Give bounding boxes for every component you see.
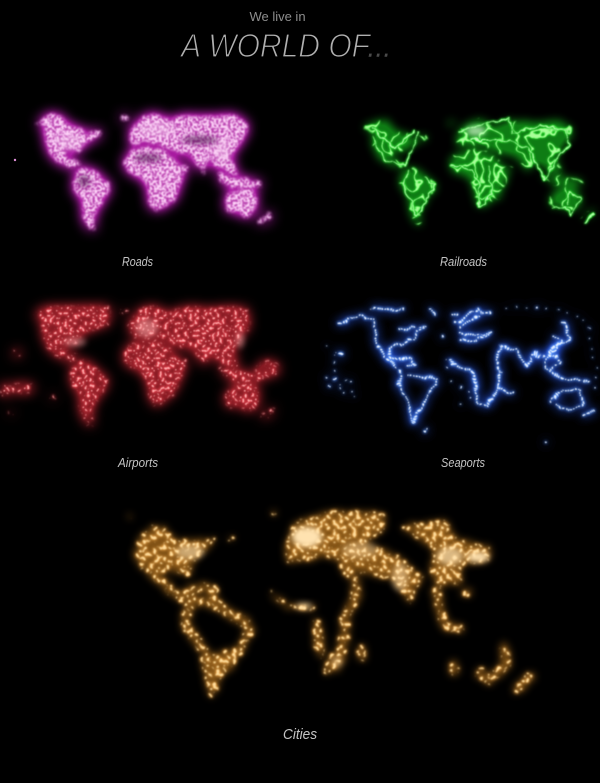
map: airports (red) — [1, 306, 280, 425]
hot spots: Europe and eastern US — [64, 319, 244, 348]
map: seaports (blue, dotted coastlines) — [325, 307, 597, 444]
map: roads (magenta) — [14, 114, 271, 230]
hot spot: roads in Europe, North America, South Asia — [56, 122, 231, 162]
label: Railroads: Railroads — [440, 254, 487, 269]
label: Seaports: Seaports — [441, 455, 485, 470]
map: cities (amber) — [127, 510, 531, 698]
title: A WORLD OF...: ... — [367, 27, 392, 64]
label: Cities: Cities — [283, 726, 317, 743]
subtitle: We live in: We live in — [249, 9, 306, 24]
label: Roads: Roads — [122, 254, 153, 269]
title: A WORLD OF...: A WORLD OF — [179, 27, 372, 64]
map: railroads (green) — [364, 118, 595, 224]
rail trunk lines — [373, 118, 594, 222]
hot spot: European rail network — [466, 126, 486, 136]
hot spots: Europe, China, Japan, US, India, Nigeria — [176, 527, 489, 667]
label: Airports: Airports — [117, 455, 158, 470]
dark patches: Amazon, Sahara, Central Asia — [78, 136, 218, 187]
icon: Hawaii speck — [14, 159, 16, 161]
